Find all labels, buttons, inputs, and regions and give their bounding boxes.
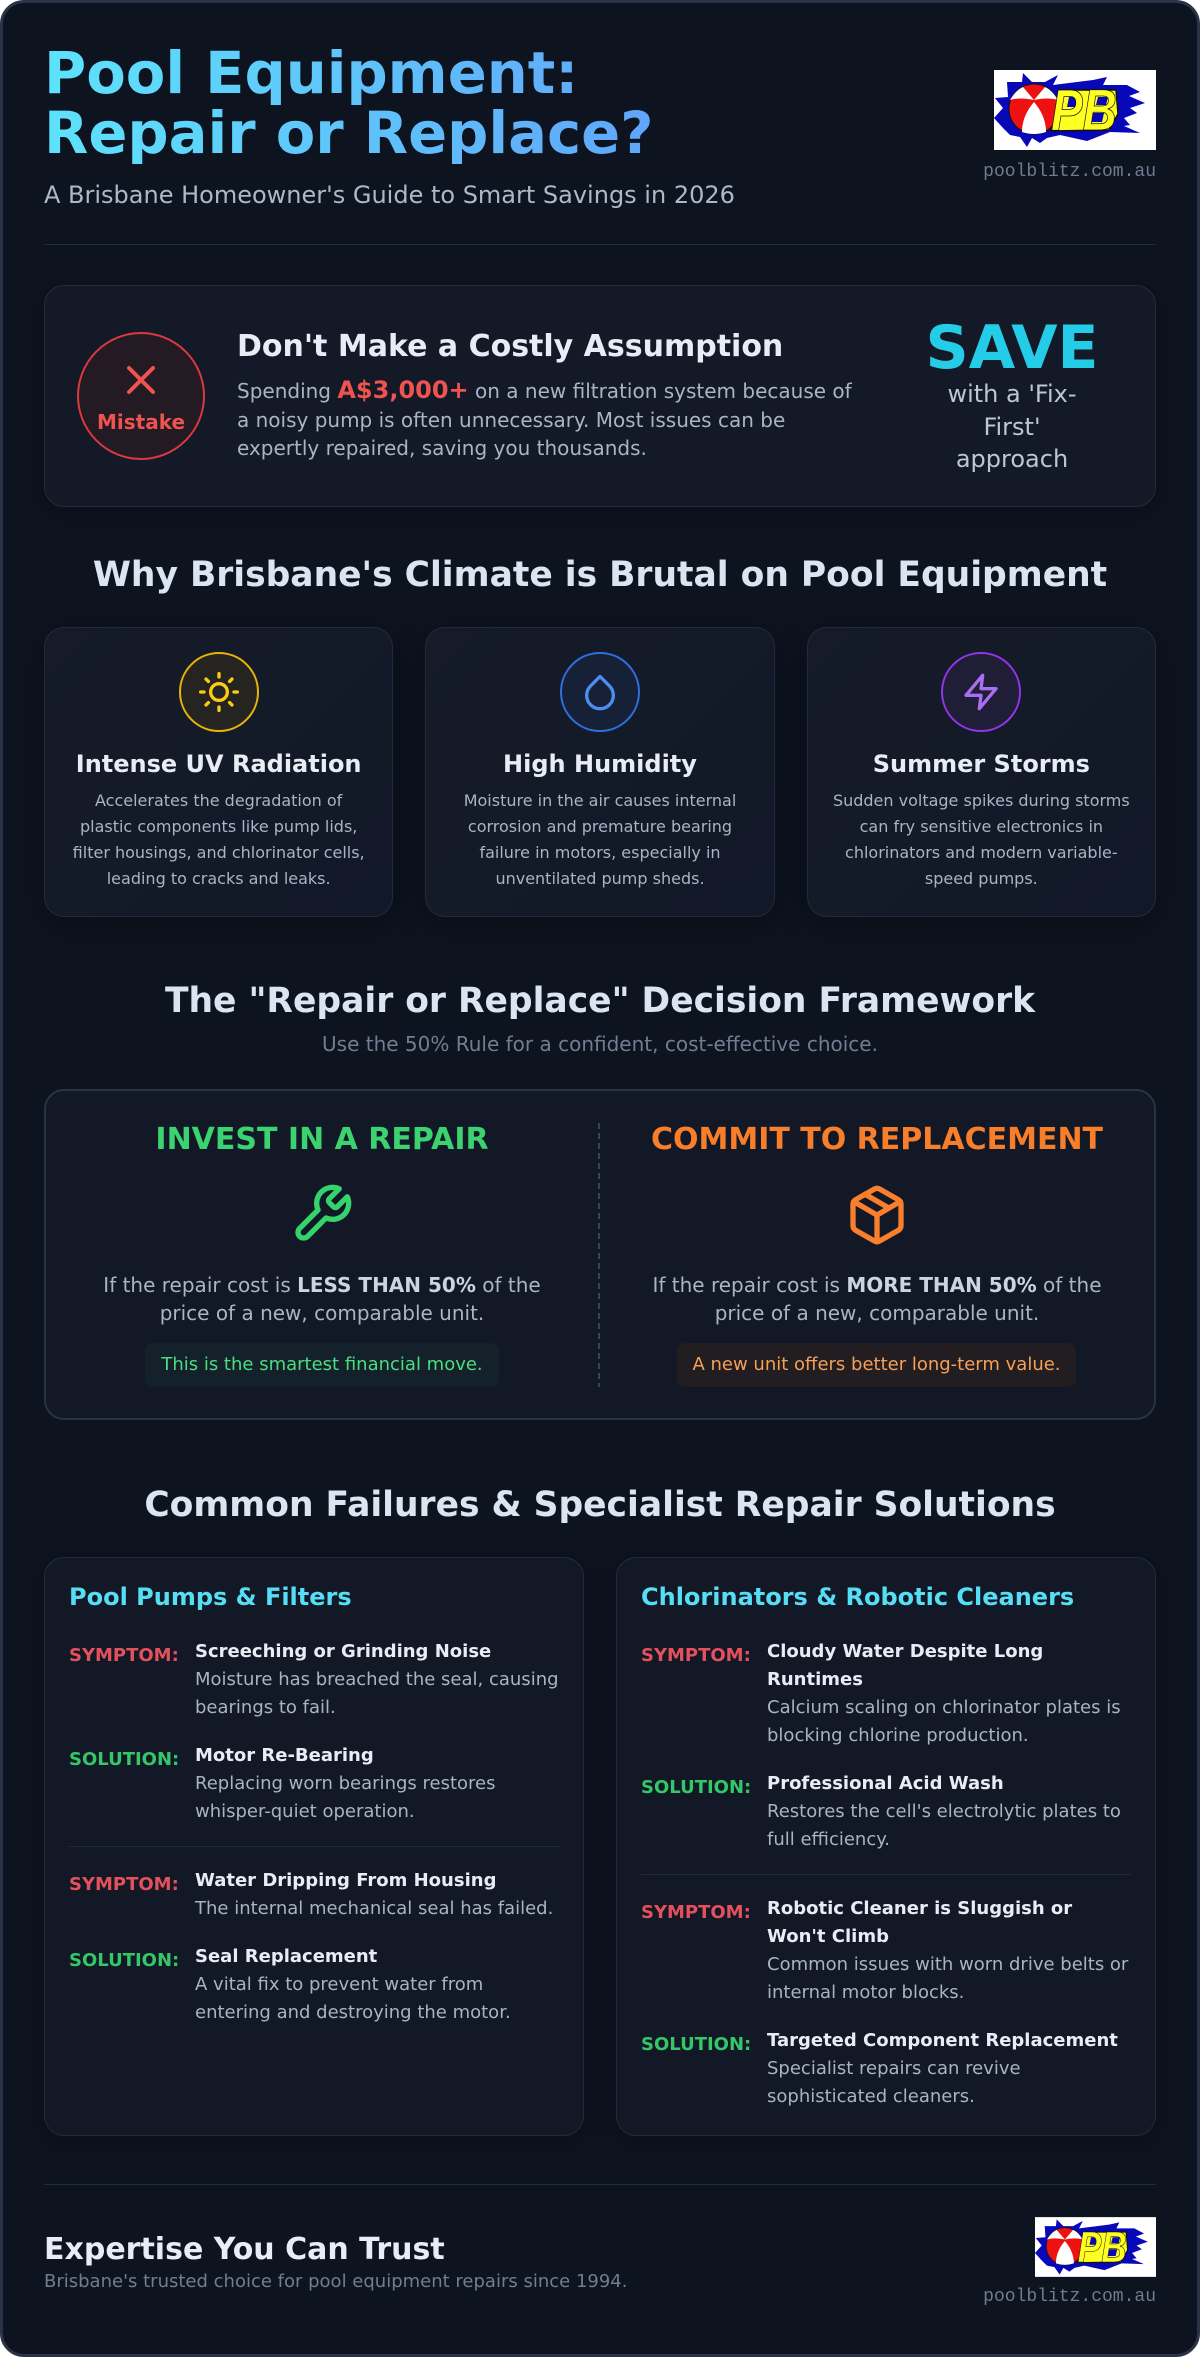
card: UV: leading to cracks and leaks.: [107, 868, 331, 888]
replace verdict pill: A new unit offers better long-term value.: [692, 1354, 1061, 1375]
panel: pumps and filters: entering and destroying the motor.: [195, 2002, 511, 2023]
panel: costly assumption alert: [44, 285, 1156, 507]
panel: pumps and filters: Motor Re-Bearing: [195, 1745, 374, 1766]
column: replace: [651, 1122, 1103, 1387]
panel: chlorinators and cleaners: SOLUTION:: [641, 2034, 751, 2055]
footer logo: PB: [1078, 2224, 1127, 2272]
card: UV: [44, 627, 393, 917]
panel: chlorinators and cleaners: SYMPTOM:: [641, 1902, 751, 1923]
card: humidity: High Humidity: [503, 750, 697, 778]
heading: framework: The "Repair or Replace" Decision Framework: [165, 981, 1035, 1021]
card: humidity: corrosion and premature bearing: [468, 816, 732, 836]
panel: pumps and filters: SYMPTOM:: [69, 1645, 179, 1666]
title: Repair or Replace?: [44, 100, 654, 167]
panel: chlorinators and cleaners: Professional Acid Wash: [767, 1773, 1004, 1794]
panel: chlorinators and cleaners: Chlorinators & Robotic Cleaners: [641, 1583, 1074, 1611]
alert text: Spending A$3,000+ on a new filtration system because of: [237, 376, 852, 404]
header logo: [994, 70, 1156, 150]
panel: chlorinators and cleaners: Targeted Component Replacement: [767, 2030, 1118, 2051]
repair rule text: [103, 1273, 541, 1325]
repair verdict pill: [145, 1343, 499, 1387]
panel: pumps and filters: whisper-quiet operation.: [195, 1801, 415, 1822]
replace rule text: [652, 1273, 1102, 1325]
card: UV: Accelerates the degradation of: [95, 790, 342, 810]
panel: chlorinators and cleaners: blocking chlorine production.: [767, 1725, 1029, 1746]
panel: chlorinators and cleaners: Restores the cell's electrolytic plates to: [767, 1801, 1121, 1822]
save callout: approach: [956, 445, 1068, 473]
footer website: poolblitz.com.au: [983, 2287, 1156, 2307]
panel: chlorinators and cleaners: Cloudy Water Despite Long: [767, 1641, 1043, 1662]
save callout: [926, 313, 1098, 473]
card: storms: chlorinators and modern variable-: [845, 842, 1118, 862]
panel: chlorinators and cleaners: Won't Climb: [767, 1926, 889, 1947]
heading: failures: Common Failures & Specialist Repair Solutions: [144, 1485, 1056, 1525]
framework subtitle: Use the 50% Rule for a confident, cost-effective choice.: [322, 1032, 878, 1056]
mistake badge: Mistake: [97, 410, 185, 434]
alert text: expertly repaired, saving you thousands.: [237, 436, 647, 460]
repair heading: INVEST IN A REPAIR: [155, 1122, 489, 1157]
alert heading: Don't Make a Costly Assumption: [237, 329, 783, 364]
panel: chlorinators and cleaners: SOLUTION:: [641, 1777, 751, 1798]
title: Pool Equipment:: [44, 40, 578, 107]
card: storms: Sudden voltage spikes during storms: [833, 790, 1130, 810]
panel: decision framework: [44, 1089, 1156, 1420]
icon: sun: [179, 652, 259, 732]
panel: chlorinators and cleaners: Specialist repairs can revive: [767, 2058, 1021, 2079]
save callout: First': [983, 412, 1041, 440]
header website: poolblitz.com.au: [983, 162, 1156, 182]
footer heading: Expertise You Can Trust: [44, 2232, 445, 2267]
footer tagline: Brisbane's trusted choice for pool equipment repairs since 1994.: [44, 2271, 627, 2292]
replace rule text: price of a new, comparable unit.: [715, 1301, 1039, 1325]
panel: pumps and filters: Moisture has breached the seal, causing: [195, 1669, 559, 1690]
panel: pumps and filters: Seal Replacement: [195, 1946, 377, 1967]
repair rule text: If the repair cost is LESS THAN 50% of the: [103, 1273, 541, 1297]
card: storms: can fry sensitive electronics in: [860, 816, 1103, 836]
panel: chlorinators and cleaners: SYMPTOM:: [641, 1645, 751, 1666]
panel: chlorinators and cleaners: Common issues with worn drive belts or: [767, 1954, 1128, 1975]
repair verdict pill: This is the smartest financial move.: [161, 1354, 483, 1375]
panel: pumps and filters: bearings to fail.: [195, 1697, 336, 1718]
panel: pumps and filters: SYMPTOM:: [69, 1874, 179, 1895]
icon: lightning bolt: [941, 652, 1021, 732]
panel: pumps and filters: [44, 1557, 584, 2136]
subtitle: A Brisbane Homeowner's Guide to Smart Savings in 2026: [44, 181, 735, 209]
card: UV: plastic components like pump lids,: [80, 816, 357, 836]
title: [44, 44, 654, 164]
panel: pumps and filters: Screeching or Grinding Noise: [195, 1641, 491, 1662]
divider: dashed: [598, 1123, 600, 1387]
panel: pumps and filters: Replacing worn bearings restores: [195, 1773, 495, 1794]
icon: box: [850, 1186, 904, 1244]
panel: chlorinators and cleaners: full efficiency.: [767, 1829, 890, 1850]
card: UV: Intense UV Radiation: [76, 750, 362, 778]
panel: pumps and filters: SOLUTION:: [69, 1950, 179, 1971]
card: storms: Summer Storms: [873, 750, 1090, 778]
panel: chlorinators and cleaners: internal motor blocks.: [767, 1982, 964, 2003]
alert text: a noisy pump is often unnecessary. Most issues can be: [237, 408, 785, 432]
panel: pumps and filters: Water Dripping From Housing: [195, 1870, 496, 1891]
panel: chlorinators and cleaners: Runtimes: [767, 1669, 863, 1690]
card: humidity: unventilated pump sheds.: [495, 868, 705, 888]
card: UV: filter housings, and chlorinator cells,: [73, 842, 365, 862]
save callout: with a 'Fix-: [947, 380, 1077, 408]
replace verdict pill: [677, 1343, 1076, 1387]
icon: water drop: [560, 652, 640, 732]
panel: chlorinators and cleaners: Calcium scaling on chlorinator plates is: [767, 1697, 1121, 1718]
panel: pumps and filters: A vital fix to prevent water from: [195, 1974, 483, 1995]
panel: chlorinators and cleaners: sophisticated cleaners.: [767, 2086, 975, 2107]
card: humidity: [425, 627, 775, 917]
replace heading: COMMIT TO REPLACEMENT: [651, 1122, 1103, 1157]
replace rule text: If the repair cost is MORE THAN 50% of the: [652, 1273, 1102, 1297]
panel: chlorinators and cleaners: Robotic Cleaner is Sluggish or: [767, 1898, 1072, 1919]
repair rule text: price of a new, comparable unit.: [160, 1301, 484, 1325]
icon: wrench: [295, 1184, 352, 1241]
header logo: PB: [1051, 78, 1117, 143]
save callout: SAVE: [926, 313, 1098, 383]
card: humidity: failure in motors, especially in: [479, 842, 721, 862]
panel: pumps and filters: Pool Pumps & Filters: [69, 1583, 352, 1611]
card: humidity: Moisture in the air causes internal: [464, 790, 736, 810]
heading: climate: Why Brisbane's Climate is Brutal on Pool Equipment: [93, 555, 1107, 595]
mistake badge: [77, 332, 205, 460]
panel: pumps and filters: SOLUTION:: [69, 1749, 179, 1770]
panel: pumps and filters: The internal mechanical seal has failed.: [195, 1898, 553, 1919]
alert text: [237, 376, 852, 460]
card: storms: speed pumps.: [925, 868, 1038, 888]
panel: chlorinators and cleaners: [616, 1557, 1156, 2136]
footer logo: [1035, 2217, 1156, 2277]
column: repair: [103, 1122, 541, 1387]
card: storms: [807, 627, 1156, 917]
